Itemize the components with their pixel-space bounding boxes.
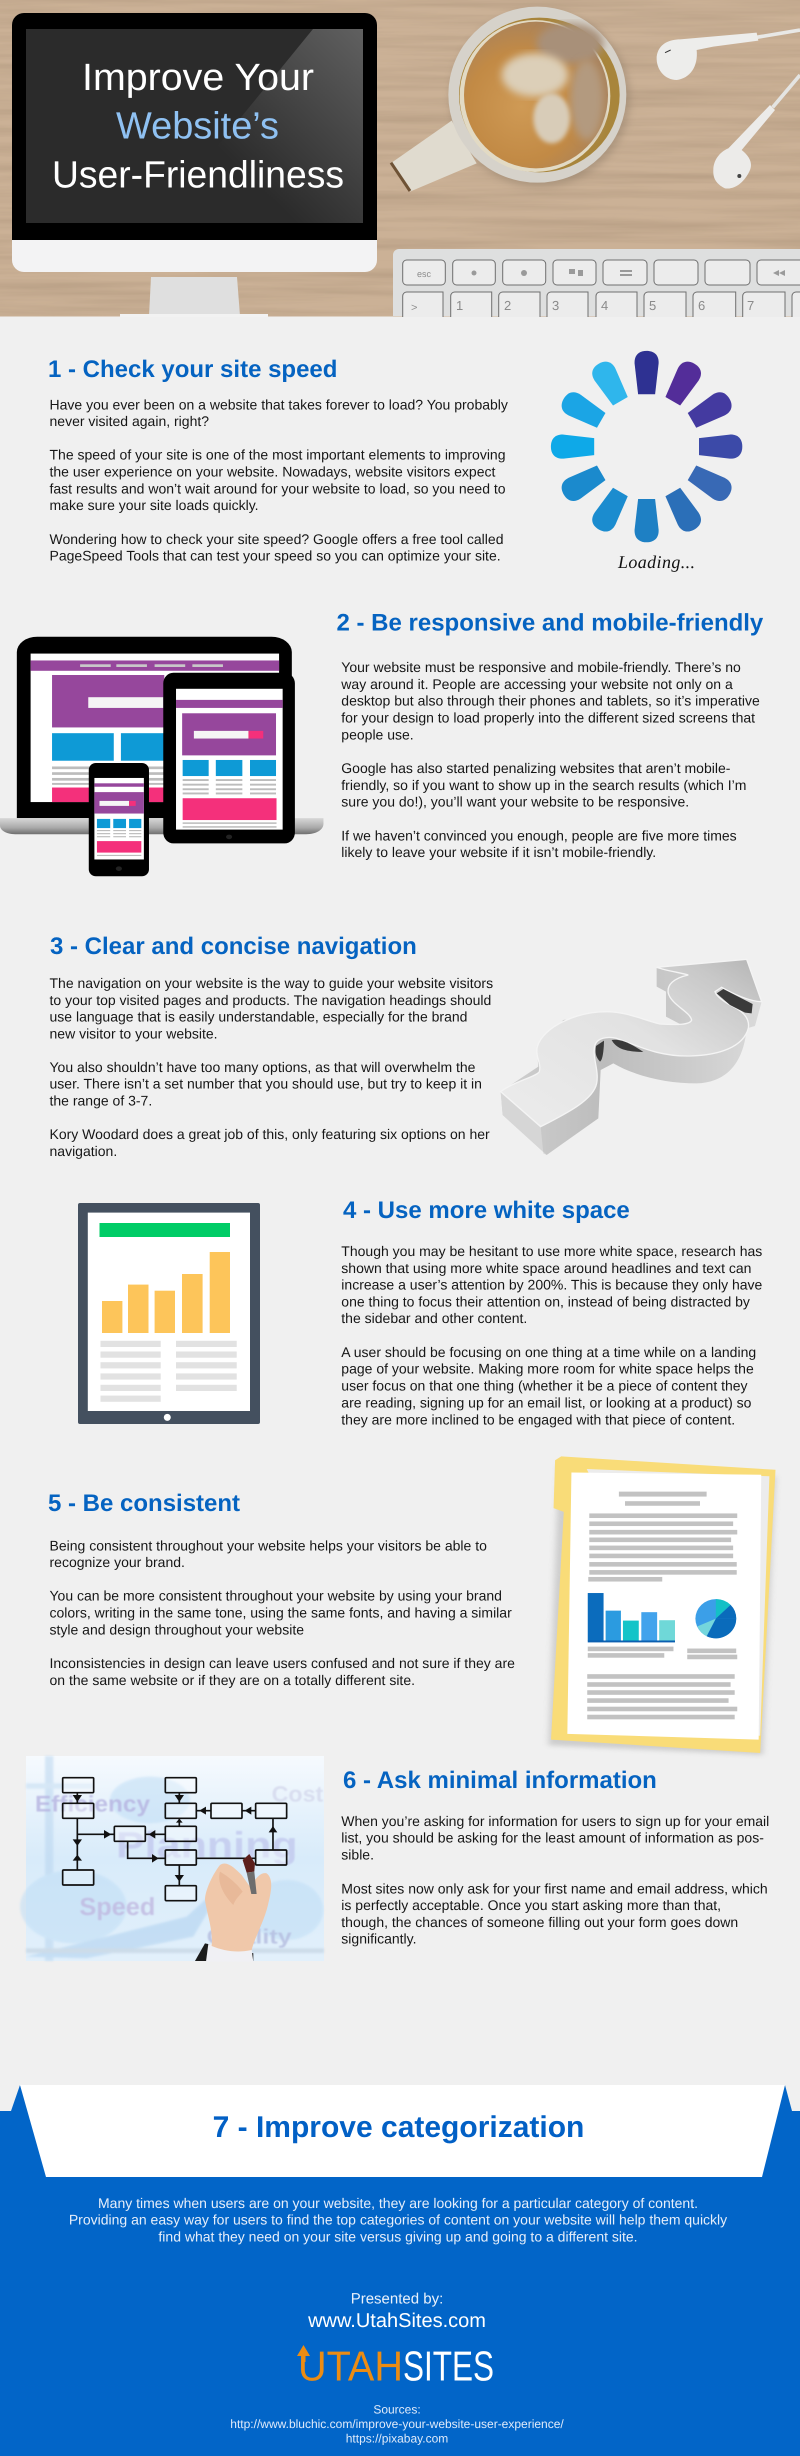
text block 2: people use. [341, 726, 414, 742]
text block 2: If we haven’t convinced you enough, people are five more times [341, 827, 737, 843]
paper [567, 1472, 761, 1740]
text block 2: for your design to load properly into the different sized screens that [341, 710, 755, 726]
text block 5: on the same website or if they are on a totally different site. [50, 1672, 415, 1688]
text block 4: the sidebar and other content. [341, 1310, 527, 1326]
text block 4: A user should be focusing on one thing at a time while on a landing [341, 1344, 756, 1360]
loading label: Loading... [617, 552, 695, 572]
sources: Sources: [373, 2402, 421, 2416]
sources [230, 2402, 564, 2446]
placeholder text lines [100, 1341, 237, 1402]
photo: keyboard: esc [417, 269, 432, 279]
text block 3: Kory Woodard does a great job of this, only featuring six options on her [50, 1126, 490, 1142]
text block 4: increase a user’s attention by 200%. This is because they only have [341, 1277, 763, 1293]
logo: UtahSites: UTAH [298, 2343, 403, 2390]
faded words: Speed [79, 1893, 155, 1920]
text block 6: sible. [341, 1846, 374, 1862]
sources: https://pixabay.com [346, 2432, 448, 2446]
text block 6: though, the chances of someone filling out your form goes down [341, 1914, 738, 1930]
bar chart [102, 1252, 230, 1333]
title: User-Friendliness [52, 154, 344, 196]
heading 7: 7 - Improve categorization [213, 2111, 584, 2144]
report bar chart [588, 1593, 675, 1642]
photo: coffee cup [391, 7, 630, 192]
text block 6: is perfectly acceptable. Once you start asking more than that, [341, 1897, 721, 1913]
text block 4: page of your website. Making more room for white space helps the [341, 1361, 754, 1377]
faded words: Planning [116, 1824, 298, 1865]
photo: keyboard: 2 [504, 298, 511, 313]
section 5: be consistent [48, 1456, 776, 1755]
icon: loading spinner [551, 351, 742, 572]
phone [89, 763, 149, 876]
text block 4: are reading, signing up for an email list, or looking at a product) so [341, 1394, 752, 1410]
text block 4: Though you may be hesitant to use more white space, research has [341, 1243, 762, 1259]
title [52, 57, 344, 196]
section 6: ask minimal information [20, 1756, 769, 1962]
photo: keyboard: 1 [456, 298, 463, 313]
text block 6: significantly. [341, 1930, 417, 1946]
text block 3: use language that is easily understandable, especially for the brand [50, 1009, 467, 1025]
text block 1: never visited again, right? [50, 413, 209, 429]
text block 5: You can be more consistent throughout your website by using your brand [50, 1588, 502, 1604]
heading 5: 5 - Be consistent [48, 1490, 240, 1517]
photo: keyboard [393, 249, 800, 317]
text block 1: fast results and won’t wait around for your website to load, so you need to [50, 480, 506, 496]
heading 2: 2 - Be responsive and mobile-friendly [336, 610, 764, 637]
blue background [0, 2085, 800, 2456]
heading 4: 4 - Use more white space [343, 1197, 630, 1224]
report pie chart [695, 1599, 736, 1638]
text block 6: list, you should be asking for the least amount of information as pos- [341, 1830, 764, 1846]
faded words: Cost [272, 1782, 323, 1806]
text block 1: the user experience on your website. Nowadays, website visitors expect [50, 464, 495, 480]
text block 5: style and design throughout your website [50, 1621, 304, 1637]
photo: keyboard: 5 [649, 298, 656, 313]
text block 2: Your website must be responsive and mobile-friendly. There’s no [341, 659, 741, 675]
section 4: use more white space [78, 1197, 763, 1427]
text block 1: The speed of your site is one of the most important elements to improving [50, 446, 506, 462]
text block 3: the range of 3-7. [50, 1092, 152, 1108]
hand holding marker [195, 1854, 271, 1962]
photo: earbuds [657, 30, 800, 189]
text block 6 [341, 1813, 769, 1946]
text block 6: Most sites now only ask for your first name and email address, which [341, 1880, 768, 1896]
white ribbon [20, 2085, 785, 2177]
photo: keyboard: > [411, 302, 417, 314]
faded words [35, 1782, 323, 1948]
flowchart arrowheads [73, 1795, 277, 1882]
photo: keyboard: 4 [601, 298, 608, 313]
text block 4 [341, 1243, 763, 1427]
illustration: tablet with bar chart [78, 1203, 260, 1424]
presented by [307, 2290, 486, 2332]
illustration: silver winding arrow [501, 959, 762, 1155]
flowchart connectors [77, 1793, 273, 1886]
section 2: be responsive and mobile-friendly [0, 610, 764, 876]
text block 4: they are more inclined to be engaged with that piece of content. [341, 1411, 735, 1427]
logo: UtahSites [297, 2343, 494, 2390]
text block 3 [50, 975, 493, 1159]
presented by: www.UtahSites.com [307, 2310, 486, 2332]
folder [551, 1456, 776, 1753]
text block 5 [50, 1538, 515, 1688]
text block 4: one thing to focus their attention on, instead of being distracted by [341, 1293, 750, 1309]
text block 4: shown that using more white space around headlines and text can [341, 1260, 751, 1276]
monitor stand [120, 277, 268, 317]
text block 7: find what they need on your site versus giving up and going to a different site. [158, 2228, 638, 2244]
text block 5: recognize your brand. [50, 1554, 185, 1570]
monitor [12, 13, 377, 272]
section 3: clear and concise navigation [50, 933, 762, 1159]
illustration: responsive devices [0, 637, 323, 876]
text block 7: Providing an easy way for users to find the top categories of content on your website will help them quickly [69, 2212, 727, 2228]
title: Website’s [116, 106, 279, 148]
text block 3: navigation. [50, 1143, 117, 1159]
photo: keyboard: 6 [698, 298, 705, 313]
faded words: Quality [207, 1925, 292, 1948]
text block 1: make sure your site loads quickly. [50, 497, 259, 513]
text block 2: desktop but also through their phones and tablets, so it’s imperative [341, 693, 760, 709]
text block 3: to your top visited pages and products. The navigation headings should [50, 992, 491, 1008]
text block 2: likely to leave your website if it isn’t mobile-friendly. [341, 844, 656, 860]
text block 3: user. There isn’t a set number that you should use, but try to keep it in [50, 1076, 482, 1092]
text block 3: The navigation on your website is the way to guide your website visitors [50, 975, 493, 991]
hero banner [0, 0, 800, 317]
faded background shapes [20, 1756, 324, 1961]
heading 6: 6 - Ask minimal information [343, 1767, 657, 1794]
text block 7: Many times when users are on your website, they are looking for a particular category of content. [98, 2195, 698, 2211]
heading 3: 3 - Clear and concise navigation [50, 933, 417, 960]
text block 3: new visitor to your website. [50, 1026, 218, 1042]
report text lines [587, 1492, 737, 1719]
text block 3: You also shouldn’t have too many options, as that will overwhelm the [50, 1059, 476, 1075]
flowchart boxes [63, 1778, 287, 1901]
text block 2: friendly, so if you want to show up in the search results (which I’m [341, 777, 746, 793]
arrow hole shadows [596, 989, 753, 1062]
text block 2 [340, 659, 760, 860]
photo: keyboard: 3 [552, 298, 559, 313]
section 1: check your site speed [48, 351, 742, 572]
laptop [0, 637, 323, 834]
text block 5: Inconsistencies in design can leave users confused and not sure if they are [50, 1655, 515, 1671]
text block 2: sure you do!), you’ll want your website to be responsive. [341, 794, 689, 810]
text block 2: Google has also started penalizing websites that aren’t mobile- [341, 760, 731, 776]
text block 5: colors, writing in the same tone, using the same fonts, and having a similar [50, 1604, 512, 1620]
heading 1: 1 - Check your site speed [48, 356, 337, 383]
text block 5: Being consistent throughout your website helps your visitors be able to [50, 1538, 487, 1554]
text block 2: way around it. People are accessing your website not only on a [340, 676, 733, 692]
text block 6: When you’re asking for information for users to sign up for your email [341, 1813, 769, 1829]
text block 1: PageSpeed Tools that can test your speed so you can optimize your site. [50, 548, 501, 564]
photo: keyboard: 7 [747, 298, 754, 313]
wood desk background [0, 0, 800, 316]
sources: http://www.bluchic.com/improve-your-website-user-experience/ [230, 2417, 564, 2431]
text block 1: Have you ever been on a website that takes forever to load? You probably [50, 396, 508, 412]
illustration: yellow folder with report [548, 1456, 776, 1755]
presented by: Presented by: [351, 2290, 443, 2308]
illustration: flowchart drawn by hand [20, 1756, 324, 1962]
section 7: footer panel [0, 2085, 800, 2456]
faded words: Efficiency [35, 1791, 150, 1817]
tablet [163, 673, 295, 843]
text block 1 [50, 396, 508, 564]
logo: UtahSites: SITES [403, 2343, 494, 2390]
green header bar [100, 1223, 230, 1237]
title: Improve Your [82, 57, 314, 99]
text block 1: Wondering how to check your site speed? Google offers a free tool called [50, 531, 503, 547]
text block 7 [69, 2195, 727, 2244]
text block 4: user focus on that one thing (whether it be a piece of content they [341, 1378, 748, 1394]
